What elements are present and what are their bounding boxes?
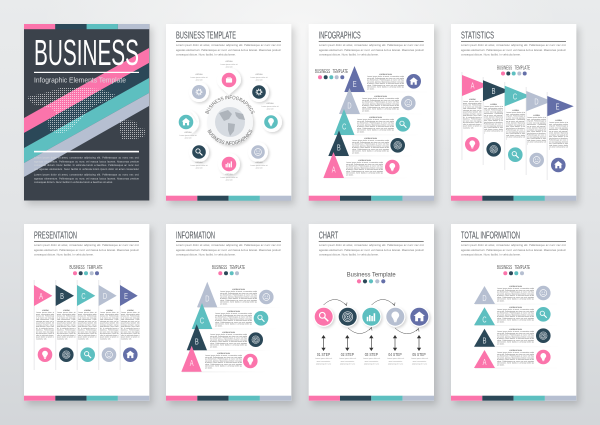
intro text: Lorem ipsum dolor sit amet, consectetur adipiscing elit. Pellentesque ac nunc nec orci egestas elementum. Pellentesque ac nunc vel massa luctus laoreet. Maecenas pretium consequat dictum. Nunc facilisi. In vehicula lorem. xyxy=(461,244,566,256)
triangle C xyxy=(474,307,495,325)
triangle B: B xyxy=(483,338,487,346)
icon ring: upper left xyxy=(189,82,209,102)
flag A: A xyxy=(39,293,43,301)
text B: LOREM IPSUM xyxy=(222,331,235,333)
column text B: LOREM xyxy=(63,309,69,311)
panel: presentation xyxy=(24,224,149,401)
globe badge: BUSINESS INFOGRAPHICS xyxy=(208,130,252,145)
triangle D: D xyxy=(205,296,209,304)
step text 3: Lorem ipsum dolor sit amet consectetur adipiscing elit nunc xyxy=(363,357,380,365)
text D: LOREM IPSUM xyxy=(232,288,245,290)
text C: Lorem ipsum dolor sit amet, consectetur adipiscing elit. Pellentesque ac nunc nec orci egestas elementum. Pellentesque ac nunc vel massa luctus laoreet. Maecenas pretium consequat dictum. Nunc facilisi. In vehicula lorem a faucibus. Pellentesque ac nunc nec orci egestas elementum. Nunc facilisi in vehicula lorem ipsum dolor. xyxy=(357,118,394,133)
icon: target xyxy=(59,347,74,362)
step labels: 01 STEP xyxy=(317,352,330,357)
ring label: bottom: Lorem ipsum dolor sit amet elit xyxy=(220,176,238,181)
icon: bulb xyxy=(536,350,551,364)
triangle B: B xyxy=(195,339,199,347)
cover title: BUSINESS xyxy=(34,32,139,73)
column text A: Lorem ipsum dolor sit amet, consectetur adipiscing elit. Pellentesque ac nunc nec orci egestas elementum. Pellentesque ac nunc vel massa luctus laoreet. Maecenas pretium consequat dictum. Nunc facilisi. In vehicula lorem a faucibus. Pellentesque ac nunc nec orci egestas elementum. Nunc facilisi in vehicula lorem ipsum dolor sit amet consectetur elit. xyxy=(463,100,482,129)
text A: Lorem ipsum dolor sit amet, consectetur adipiscing elit. Pellentesque ac nunc nec orci egestas elementum. Pellentesque ac nunc vel massa luctus laoreet. Maecenas pretium consequat dictum. Nunc facilisi. In vehicula lorem a faucibus. Pellentesque ac nunc nec orci egestas elementum. Nunc facilisi in vehicula lorem ipsum dolor. xyxy=(497,351,534,366)
ring label: upper right: OPTION xyxy=(256,73,262,76)
step text 2: Lorem ipsum dolor sit amet consectetur adipiscing elit nunc xyxy=(339,357,356,365)
legend: BUSINESS TEMPLATE xyxy=(315,69,348,75)
column text E: Lorem ipsum dolor sit amet, consectetur adipiscing elit. Pellentesque ac nunc nec orci egestas elementum. Pellentesque ac nunc vel massa luctus laoreet. Maecenas pretium consequat dictum. Nunc facilisi. In vehicula lorem a faucibus. Pellentesque ac nunc nec orci egestas elementum. Nunc facilisi in vehicula lorem ipsum dolor sit amet consectetur elit. xyxy=(548,121,568,150)
intro text: Lorem ipsum dolor sit amet, consectetur adipiscing elit. Pellentesque ac nunc nec orci egestas elementum. Pellentesque ac nunc vel massa luctus laoreet. Maecenas pretium consequat dictum. Nunc facilisi. In vehicula lorem. xyxy=(461,44,566,56)
intro text: Lorem ipsum dolor sit amet, consectetur adipiscing elit. Pellentesque ac nunc nec orci egestas elementum. Pellentesque ac nunc vel massa luctus laoreet. Maecenas pretium consequat dictum. Nunc facilisi. In vehicula lorem. xyxy=(319,244,424,256)
ring label: upper right xyxy=(249,73,269,82)
icon: search xyxy=(254,311,268,326)
flag E: E xyxy=(556,104,560,112)
legend xyxy=(347,272,396,283)
heading: PRESENTATION xyxy=(34,230,77,242)
triangle D xyxy=(197,282,217,307)
panel: cover page xyxy=(24,24,149,200)
column text A: Lorem ipsum dolor sit amet, consectetur adipiscing elit. Pellentesque ac nunc nec orci egestas elementum. Pellentesque ac nunc vel massa luctus laoreet. Maecenas pretium consequat dictum. Nunc facilisi. In vehicula lorem a faucibus. Pellentesque ac nunc nec orci egestas elementum. Nunc facilisi in vehicula lorem ipsum dolor sit amet consectetur elit. xyxy=(36,311,54,340)
icon ring: lower left xyxy=(189,142,209,162)
icon ring: bottom xyxy=(218,153,240,175)
column text D: LOREM xyxy=(534,114,540,116)
globe badge xyxy=(205,96,256,148)
ring label: left: OPTION xyxy=(185,131,191,134)
row shadows xyxy=(475,304,560,368)
step labels xyxy=(317,352,426,357)
legend: BUSINESS TEMPLATE xyxy=(70,265,103,271)
triangle B xyxy=(474,329,495,347)
cover text block 2: Lorem ipsum dolor sit amet, consectetur adipiscing elit. Pellentesque ac nunc nec orci egestas elementum. Pellentesque ac nunc vel massa luctus laoreet. Maecenas pretium consequat dictum. Nunc facilisi in vehicula lorem a faucibus sit amet. xyxy=(34,173,139,183)
triangle D xyxy=(474,286,495,304)
flag C xyxy=(77,285,95,306)
ring label: bottom: OPTION xyxy=(226,173,232,176)
icon: bulb xyxy=(385,160,400,174)
intro text: Lorem ipsum dolor sit amet, consectetur adipiscing elit. Pellentesque ac nunc nec orci egestas elementum. Pellentesque ac nunc vel massa luctus laoreet. Maecenas pretium consequat dictum. Nunc facilisi. In vehicula lorem. xyxy=(319,44,424,56)
flag B: B xyxy=(60,293,64,301)
ring label: right: OPTION xyxy=(267,102,273,104)
column text A: LOREM xyxy=(469,98,475,100)
bottom colour bar xyxy=(166,196,291,201)
text D: Lorem ipsum dolor sit amet, consectetur adipiscing elit. Pellentesque ac nunc nec orci egestas elementum. Pellentesque ac nunc vel massa luctus laoreet. Maecenas pretium consequat dictum. Nunc facilisi. In vehicula lorem a faucibus. Pellentesque ac nunc nec orci egestas elementum. Nunc facilisi in vehicula lorem ipsum dolor. xyxy=(220,290,257,305)
column text C: Lorem ipsum dolor sit amet, consectetur adipiscing elit. Pellentesque ac nunc nec orci egestas elementum. Pellentesque ac nunc vel massa luctus laoreet. Maecenas pretium consequat dictum. Nunc facilisi. In vehicula lorem a faucibus. Pellentesque ac nunc nec orci egestas elementum. Nunc facilisi in vehicula lorem ipsum dolor sit amet consectetur elit. xyxy=(78,311,97,340)
column text C: Lorem ipsum dolor sit amet, consectetur adipiscing elit. Pellentesque ac nunc nec orci egestas elementum. Pellentesque ac nunc vel massa luctus laoreet. Maecenas pretium consequat dictum. Nunc facilisi. In vehicula lorem a faucibus. Pellentesque ac nunc nec orci egestas elementum. Nunc facilisi in vehicula lorem ipsum dolor sit amet consectetur elit. xyxy=(506,111,525,140)
ring label: top xyxy=(219,60,239,69)
column text E: LOREM xyxy=(127,309,134,311)
ring label: right xyxy=(260,102,280,111)
flag C: C xyxy=(513,94,517,102)
text D: Lorem ipsum dolor sit amet, consectetur adipiscing elit. Pellentesque ac nunc nec orci egestas elementum. Pellentesque ac nunc vel massa luctus laoreet. Maecenas pretium consequat dictum. Nunc facilisi. In vehicula lorem a faucibus. Pellentesque ac nunc nec orci egestas elementum. Nunc facilisi in vehicula lorem ipsum dolor. xyxy=(497,287,534,302)
triangle C: C xyxy=(482,317,487,325)
intro text: Lorem ipsum dolor sit amet, consectetur adipiscing elit. Pellentesque ac nunc nec orci egestas elementum. Pellentesque ac nunc vel massa luctus laoreet. Maecenas pretium consequat dictum. Nunc facilisi. In vehicula lorem. xyxy=(176,44,281,56)
column dividers xyxy=(462,72,548,180)
heading: BUSINESS TEMPLATE xyxy=(176,30,236,42)
column dividers xyxy=(34,280,121,370)
ring label: upper right: Lorem ipsum dolor sit amet elit xyxy=(250,76,268,81)
flag E xyxy=(547,96,574,116)
bottom colour bar xyxy=(309,196,434,201)
flow arrows xyxy=(324,300,419,334)
step text 4: Lorem ipsum dolor sit amet consectetur adipiscing elit nunc xyxy=(386,357,404,365)
icon: bulb xyxy=(465,137,480,152)
icon ring: right xyxy=(262,112,282,132)
step circle 1 xyxy=(314,307,334,327)
ring label: upper left: Lorem ipsum dolor sit amet elit xyxy=(190,76,208,81)
panel: statistics xyxy=(451,24,576,201)
dotted world map xyxy=(27,87,146,140)
icon: search xyxy=(508,147,523,162)
icon ring: lower right xyxy=(248,142,268,162)
step labels: 02 STEP xyxy=(341,352,354,357)
column text E: Lorem ipsum dolor sit amet, consectetur adipiscing elit. Pellentesque ac nunc nec orci egestas elementum. Pellentesque ac nunc vel massa luctus laoreet. Maecenas pretium consequat dictum. Nunc facilisi. In vehicula lorem a faucibus. Pellentesque ac nunc nec orci egestas elementum. Nunc facilisi in vehicula lorem ipsum dolor sit amet consectetur elit. xyxy=(121,311,140,340)
icon: target xyxy=(248,332,263,347)
ring label: upper left: OPTION xyxy=(196,73,202,76)
text C: LOREM IPSUM xyxy=(227,310,240,312)
flag E xyxy=(120,285,138,306)
diagonal stripes xyxy=(24,48,149,177)
step labels: 04 STEP xyxy=(388,352,402,357)
flag D: D xyxy=(103,293,107,301)
flag D xyxy=(99,285,117,306)
icon: search xyxy=(80,347,95,362)
cover top colour bar xyxy=(24,24,149,29)
legend xyxy=(497,66,530,76)
ring label: upper left xyxy=(189,73,209,82)
cover rule top xyxy=(34,72,139,73)
ring label: top: Lorem ipsum dolor sit amet elit xyxy=(220,63,238,68)
bottom colour bar xyxy=(24,396,149,401)
triangle A: A xyxy=(190,360,194,368)
column text D: LOREM xyxy=(106,309,112,311)
ring label: lower right: Lorem ipsum dolor sit amet elit xyxy=(250,164,268,169)
bottom colour bar xyxy=(451,396,576,401)
text B: Lorem ipsum dolor sit amet, consectetur adipiscing elit. Pellentesque ac nunc nec orci egestas elementum. Pellentesque ac nunc vel massa luctus laoreet. Maecenas pretium consequat dictum. Nunc facilisi. In vehicula lorem a faucibus. Pellentesque ac nunc nec orci egestas elementum. Nunc facilisi in vehicula lorem ipsum dolor. xyxy=(497,330,534,345)
icon: smile xyxy=(102,347,116,362)
triangle C xyxy=(334,109,354,135)
text E: Lorem ipsum dolor sit amet, consectetur adipiscing elit. Pellentesque ac nunc nec orci egestas elementum. Pellentesque ac nunc vel massa luctus laoreet. Maecenas pretium consequat dictum. Nunc facilisi. In vehicula lorem a faucibus. Pellentesque ac nunc nec orci egestas elementum. Nunc facilisi in vehicula lorem ipsum dolor. xyxy=(367,75,404,90)
step circle 2 xyxy=(338,307,358,327)
legend xyxy=(70,265,103,275)
triangle C: C xyxy=(200,318,204,326)
step text 5: Lorem ipsum dolor sit amet consectetur adipiscing elit nunc xyxy=(410,357,428,365)
heading: CHART xyxy=(319,230,339,242)
heading: INFOGRAPHICS xyxy=(319,30,361,42)
text B: LOREM IPSUM xyxy=(364,137,377,139)
text B: LOREM IPSUM xyxy=(509,328,522,330)
ring label: top: OPTION xyxy=(226,60,232,62)
step circle 5 xyxy=(409,307,429,327)
flag B xyxy=(56,285,74,306)
text C: Lorem ipsum dolor sit amet, consectetur adipiscing elit. Pellentesque ac nunc nec orci egestas elementum. Pellentesque ac nunc vel massa luctus laoreet. Maecenas pretium consequat dictum. Nunc facilisi. In vehicula lorem a faucibus. Pellentesque ac nunc nec orci egestas elementum. Nunc facilisi in vehicula lorem ipsum dolor. xyxy=(215,312,252,326)
legend xyxy=(212,265,245,275)
panel: infographics xyxy=(309,24,434,201)
ring label: lower left: OPTION xyxy=(196,161,202,164)
icon: smile xyxy=(259,290,274,304)
icon: bulb xyxy=(38,347,52,362)
flag C: C xyxy=(81,293,86,301)
ring label: lower right: OPTION xyxy=(256,161,262,164)
triangle C xyxy=(192,303,212,329)
flag B: B xyxy=(492,88,496,96)
text A: Lorem ipsum dolor sit amet, consectetur adipiscing elit. Pellentesque ac nunc nec orci egestas elementum. Pellentesque ac nunc vel massa luctus laoreet. Maecenas pretium consequat dictum. Nunc facilisi. In vehicula lorem a faucibus. Pellentesque ac nunc nec orci egestas elementum. Nunc facilisi in vehicula lorem ipsum dolor. xyxy=(346,161,383,175)
triangle A: A xyxy=(483,359,487,367)
triangle D: D xyxy=(482,295,487,303)
column text A: LOREM xyxy=(42,309,48,311)
text C: LOREM IPSUM xyxy=(509,306,522,309)
bottom colour bar xyxy=(166,396,291,401)
heading: STATISTICS xyxy=(461,30,494,42)
flag A xyxy=(462,75,488,96)
legend: BUSINESS TEMPLATE xyxy=(497,66,530,72)
triangle A xyxy=(181,346,202,372)
column text E: LOREM xyxy=(555,119,561,121)
icon: target xyxy=(536,328,551,343)
step labels: 03 STEP xyxy=(365,352,378,357)
icon: search xyxy=(536,307,551,322)
ring label: left xyxy=(178,131,198,140)
text A: LOREM IPSUM xyxy=(509,349,522,351)
intro text: Lorem ipsum dolor sit amet, consectetur adipiscing elit. Pellentesque ac nunc nec orci egestas elementum. Pellentesque ac nunc vel massa luctus laoreet. Maecenas pretium consequat dictum. Nunc facilisi. In vehicula lorem. xyxy=(176,244,281,256)
icon ring: upper right xyxy=(249,82,269,102)
panel: total information xyxy=(451,224,576,401)
triangle B xyxy=(328,130,349,156)
flag D: D xyxy=(534,99,539,107)
connector arrows xyxy=(322,336,421,350)
flag E: E xyxy=(124,293,128,301)
ring label: bottom xyxy=(219,173,239,182)
icon: smile xyxy=(401,96,416,110)
column text B: Lorem ipsum dolor sit amet, consectetur adipiscing elit. Pellentesque ac nunc nec orci egestas elementum. Pellentesque ac nunc vel massa luctus laoreet. Maecenas pretium consequat dictum. Nunc facilisi. In vehicula lorem a faucibus. Pellentesque ac nunc nec orci egestas elementum. Nunc facilisi in vehicula lorem ipsum dolor sit amet consectetur elit. xyxy=(484,105,503,134)
triangle B: B xyxy=(337,145,341,153)
triangle A xyxy=(474,350,495,368)
ring label: lower right xyxy=(249,161,269,170)
text C: LOREM IPSUM xyxy=(369,116,382,118)
text B: Lorem ipsum dolor sit amet, consectetur adipiscing elit. Pellentesque ac nunc nec orci egestas elementum. Pellentesque ac nunc vel massa luctus laoreet. Maecenas pretium consequat dictum. Nunc facilisi. In vehicula lorem a faucibus. Pellentesque ac nunc nec orci egestas elementum. Nunc facilisi in vehicula lorem ipsum dolor. xyxy=(210,333,247,348)
triangle A: A xyxy=(332,167,336,175)
triangle C: C xyxy=(342,124,346,132)
icon: smile xyxy=(529,153,544,167)
ring label: lower left: Lorem ipsum dolor sit amet elit xyxy=(190,164,208,169)
flag B xyxy=(483,80,509,101)
icon: house xyxy=(551,158,566,172)
icon ring: top xyxy=(217,68,241,95)
column text C: LOREM xyxy=(84,309,91,311)
column text D: Lorem ipsum dolor sit amet, consectetur adipiscing elit. Pellentesque ac nunc nec orci egestas elementum. Pellentesque ac nunc vel massa luctus laoreet. Maecenas pretium consequat dictum. Nunc facilisi. In vehicula lorem a faucibus. Pellentesque ac nunc nec orci egestas elementum. Nunc facilisi in vehicula lorem ipsum dolor sit amet consectetur elit. xyxy=(100,311,118,340)
cover subtitle: Infographic Elements Template xyxy=(34,77,126,84)
step text 1: Lorem ipsum dolor sit amet consectetur adipiscing elit nunc xyxy=(315,357,332,365)
panel: chart xyxy=(309,224,434,401)
legend: Business Template xyxy=(347,272,396,278)
icon: house xyxy=(123,347,138,362)
column text B: Lorem ipsum dolor sit amet, consectetur adipiscing elit. Pellentesque ac nunc nec orci egestas elementum. Pellentesque ac nunc vel massa luctus laoreet. Maecenas pretium consequat dictum. Nunc facilisi. In vehicula lorem a faucibus. Pellentesque ac nunc nec orci egestas elementum. Nunc facilisi in vehicula lorem ipsum dolor sit amet consectetur elit. xyxy=(57,311,76,340)
legend: BUSINESS TEMPLATE xyxy=(212,265,245,271)
intro text: Lorem ipsum dolor sit amet, consectetur adipiscing elit. Pellentesque ac nunc nec orci egestas elementum. Pellentesque ac nunc vel massa luctus laoreet. Maecenas pretium consequat dictum. Nunc facilisi. In vehicula lorem. xyxy=(34,244,139,256)
bottom colour bar xyxy=(451,196,576,201)
row shadows xyxy=(324,92,430,178)
triangle D: D xyxy=(347,103,352,111)
ring label: left: Lorem ipsum dolor sit amet elit xyxy=(179,134,197,139)
step labels: 05 STEP xyxy=(412,352,426,357)
column text D: Lorem ipsum dolor sit amet, consectetur adipiscing elit. Pellentesque ac nunc nec orci egestas elementum. Pellentesque ac nunc vel massa luctus laoreet. Maecenas pretium consequat dictum. Nunc facilisi. In vehicula lorem a faucibus. Pellentesque ac nunc nec orci egestas elementum. Nunc facilisi in vehicula lorem ipsum dolor sit amet consectetur elit. xyxy=(527,116,546,145)
cover rule bottom xyxy=(34,151,139,152)
triangle B xyxy=(187,324,207,350)
text A: Lorem ipsum dolor sit amet, consectetur adipiscing elit. Pellentesque ac nunc nec orci egestas elementum. Pellentesque ac nunc vel massa luctus laoreet. Maecenas pretium consequat dictum. Nunc facilisi. In vehicula lorem a faucibus. Pellentesque ac nunc nec orci egestas elementum. Nunc facilisi in vehicula lorem ipsum dolor. xyxy=(205,355,242,369)
bottom colour bar xyxy=(309,396,434,401)
text E: LOREM IPSUM xyxy=(379,73,392,75)
triangle E xyxy=(344,66,365,92)
icon: bulb xyxy=(243,354,258,368)
text B: Lorem ipsum dolor sit amet, consectetur adipiscing elit. Pellentesque ac nunc nec orci egestas elementum. Pellentesque ac nunc vel massa luctus laoreet. Maecenas pretium consequat dictum. Nunc facilisi. In vehicula lorem a faucibus. Pellentesque ac nunc nec orci egestas elementum. Nunc facilisi in vehicula lorem ipsum dolor. xyxy=(352,139,389,154)
globe badge: BUSINESS INFOGRAPHICS xyxy=(205,96,254,114)
ring label: right: Lorem ipsum dolor sit amet elit xyxy=(261,105,279,110)
text D: LOREM IPSUM xyxy=(509,285,522,287)
triangle D xyxy=(339,88,360,114)
icon: house xyxy=(406,74,421,89)
icon: target xyxy=(486,142,501,157)
column text B: LOREM xyxy=(490,103,497,105)
legend: BUSINESS TEMPLATE xyxy=(497,265,530,271)
row shadows xyxy=(182,307,283,372)
column text C: LOREM xyxy=(512,109,518,111)
flag A: A xyxy=(471,83,475,91)
triangle E: E xyxy=(353,81,357,89)
legend xyxy=(497,265,530,275)
heading: TOTAL INFORMATION xyxy=(461,230,520,242)
step circle 3 xyxy=(361,307,381,327)
flag D xyxy=(526,91,552,111)
step circle 4 xyxy=(385,307,405,327)
icon ring: left xyxy=(179,110,199,134)
icon: target xyxy=(390,138,405,153)
panel: business template xyxy=(166,24,297,208)
flag A xyxy=(34,285,52,306)
heading: INFORMATION xyxy=(176,230,215,242)
icon: smile xyxy=(536,286,551,300)
ring label: lower left xyxy=(189,161,209,170)
triangle A xyxy=(323,152,344,178)
text D: LOREM IPSUM xyxy=(374,94,387,97)
legend xyxy=(315,69,348,79)
text D: Lorem ipsum dolor sit amet, consectetur adipiscing elit. Pellentesque ac nunc nec orci egestas elementum. Pellentesque ac nunc vel massa luctus laoreet. Maecenas pretium consequat dictum. Nunc facilisi. In vehicula lorem a faucibus. Pellentesque ac nunc nec orci egestas elementum. Nunc facilisi in vehicula lorem ipsum dolor. xyxy=(362,97,399,111)
text A: LOREM IPSUM xyxy=(217,352,230,355)
text C: Lorem ipsum dolor sit amet, consectetur adipiscing elit. Pellentesque ac nunc nec orci egestas elementum. Pellentesque ac nunc vel massa luctus laoreet. Maecenas pretium consequat dictum. Nunc facilisi. In vehicula lorem a faucibus. Pellentesque ac nunc nec orci egestas elementum. Nunc facilisi in vehicula lorem ipsum dolor. xyxy=(497,309,534,323)
flag C xyxy=(505,86,530,106)
text A: LOREM IPSUM xyxy=(358,158,371,161)
panel: information xyxy=(166,224,291,401)
icon: search xyxy=(396,117,410,132)
